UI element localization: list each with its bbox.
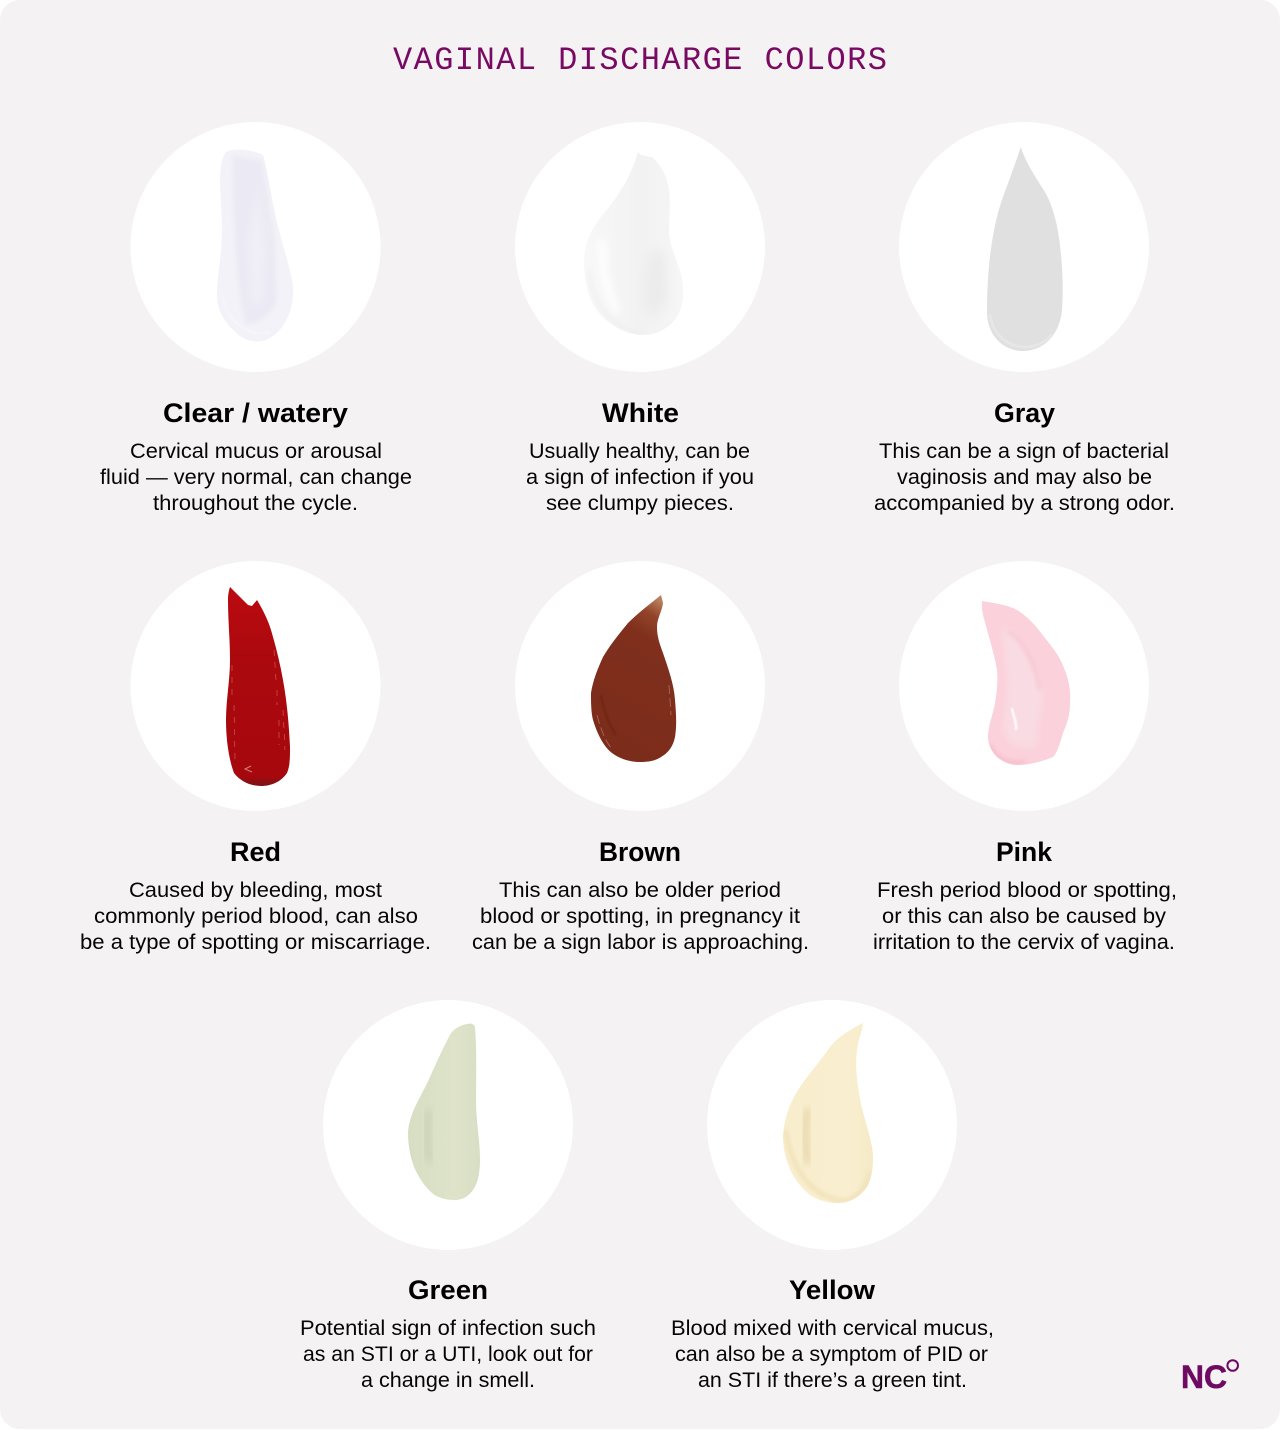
panel: red	[80, 561, 431, 954]
circle: brown	[515, 561, 765, 811]
panel: green	[300, 1000, 596, 1392]
heading: pink: Pink	[996, 837, 1053, 867]
description: gray	[874, 440, 1175, 515]
swatch: clear smear	[217, 150, 293, 342]
swatch: white smear	[585, 152, 683, 335]
swatch: gray smear	[987, 147, 1063, 351]
swatch: brown smear	[591, 595, 676, 762]
swatch: yellow smear	[783, 1023, 873, 1203]
heading: white: White	[602, 398, 679, 428]
description: brown: can be a sign labor is approaching.	[472, 931, 809, 954]
description: yellow	[671, 1317, 994, 1392]
circle: pink	[899, 561, 1149, 811]
heading: yellow: Yellow	[789, 1275, 876, 1305]
title: VAGINAL DISCHARGE COLORS	[393, 42, 887, 79]
panel: brown	[472, 561, 809, 954]
description: green: a change in smell.	[361, 1369, 535, 1392]
panel: yellow	[671, 1000, 994, 1392]
description: clear: throughout the cycle.	[153, 492, 358, 515]
description: yellow: Blood mixed with cervical mucus,	[671, 1317, 994, 1340]
description: clear: Cervical mucus or arousal	[130, 440, 382, 463]
circle: gray	[899, 122, 1149, 372]
description: red: be a type of spotting or miscarriage.	[80, 931, 431, 954]
description: red	[80, 879, 431, 954]
circle: green	[323, 1000, 573, 1250]
description: clear: fluid — very normal, can change	[100, 466, 412, 489]
circle: red	[130, 561, 380, 811]
circle: clear	[130, 122, 380, 372]
description: green: Potential sign of infection such	[300, 1317, 596, 1340]
description: gray: accompanied by a strong odor.	[874, 492, 1175, 515]
heading: red: Red	[230, 837, 281, 867]
description: pink: irritation to the cervix of vagina.	[873, 931, 1175, 954]
logo: NC: NC	[1181, 1359, 1227, 1395]
description: pink: Fresh period blood or spotting,	[877, 879, 1177, 902]
description: yellow: can also be a symptom of PID or	[675, 1343, 988, 1366]
description: white: see clumpy pieces.	[546, 492, 734, 515]
description: pink: or this can also be caused by	[882, 905, 1167, 928]
heading: brown: Brown	[599, 837, 681, 867]
description: red: commonly period blood, can also	[94, 905, 418, 928]
description: red: Caused by bleeding, most	[129, 879, 382, 902]
description: white: a sign of infection if you	[526, 466, 754, 489]
swatch: pink smear	[982, 601, 1070, 765]
heading: green: Green	[408, 1275, 488, 1305]
description: gray: vaginosis and may also be	[897, 466, 1152, 489]
panel: gray	[874, 122, 1175, 515]
description: clear	[100, 440, 412, 515]
swatch: green smear	[408, 1024, 480, 1200]
circle: white	[515, 122, 765, 372]
description: gray: This can be a sign of bacterial	[879, 440, 1169, 463]
circle: yellow	[707, 1000, 957, 1250]
swatch: red smear	[226, 587, 290, 786]
description: white: Usually healthy, can be	[529, 440, 750, 463]
description: green: as an STI or a UTI, look out for	[303, 1343, 593, 1366]
description: brown: blood or spotting, in pregnancy it	[480, 905, 800, 928]
description: green	[300, 1317, 596, 1392]
heading: gray: Gray	[994, 398, 1055, 428]
heading: clear: Clear / watery	[163, 398, 348, 428]
panel: white	[515, 122, 765, 515]
description: white	[526, 440, 754, 515]
description: pink	[873, 879, 1177, 954]
description: yellow: an STI if there’s a green tint.	[698, 1369, 967, 1392]
description: brown: This can also be older period	[499, 879, 781, 902]
panel: pink	[873, 561, 1177, 954]
panel: clear / watery	[100, 122, 412, 515]
description: brown	[472, 879, 809, 954]
